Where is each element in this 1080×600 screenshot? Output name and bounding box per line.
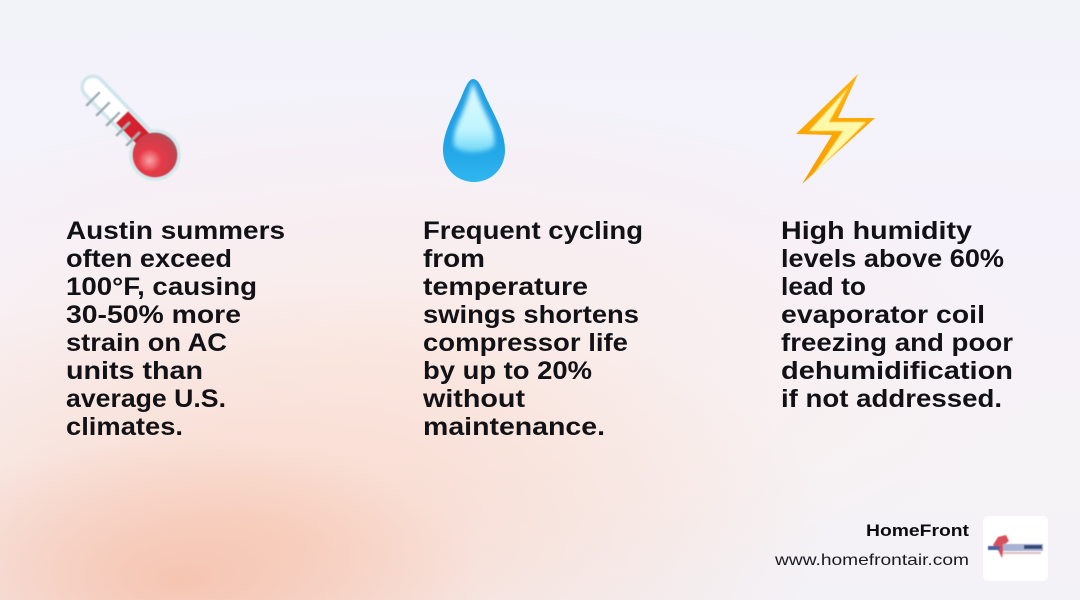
text: cycling statistic: without	[422, 385, 526, 413]
icon: lightning bolt	[796, 74, 875, 184]
panel: heat strain	[66, 87, 292, 441]
text: cycling statistic: Frequent cycling	[423, 217, 643, 245]
text: humidity statistic: freezing and poor	[781, 329, 1013, 357]
text: cycling statistic: swings shortens	[423, 301, 639, 329]
text: humidity statistic: evaporator coil	[781, 301, 985, 329]
text: heat strain statistic: often exceed	[66, 245, 232, 273]
text: heat strain statistic: average U.S.	[66, 385, 226, 413]
panel: humidity	[781, 74, 1020, 413]
icon: thermometer	[87, 87, 181, 181]
text: heat strain statistic: climates.	[66, 413, 183, 441]
text: cycling statistic: by up to 20%	[423, 357, 592, 385]
website: www.homefrontair.com	[774, 552, 969, 569]
brand name: HomeFront	[866, 521, 969, 540]
text: heat strain statistic: Austin summers	[66, 217, 285, 245]
text: humidity statistic: if not addressed.	[781, 385, 1002, 413]
text: humidity statistic: dehumidification	[781, 357, 1013, 385]
footer: brand block	[774, 516, 1048, 581]
text: heat strain statistic: 30-50% more	[66, 301, 241, 329]
icon: water drop	[443, 79, 505, 182]
text: cycling statistic: compressor life	[423, 329, 628, 357]
text: cycling statistic: temperature	[423, 273, 588, 301]
logo	[983, 516, 1048, 581]
text: heat strain statistic: strain on AC	[66, 329, 227, 357]
text: cycling statistic: from	[423, 245, 485, 273]
text: heat strain statistic: 100°F, causing	[66, 273, 257, 301]
text: cycling statistic: maintenance.	[423, 413, 605, 441]
text: humidity statistic: lead to	[781, 273, 866, 301]
text: humidity statistic: High humidity	[781, 217, 972, 245]
panel: compressor cycling	[422, 79, 650, 441]
text: heat strain statistic: units than	[66, 357, 203, 385]
text: humidity statistic: levels above 60%	[781, 245, 1004, 273]
